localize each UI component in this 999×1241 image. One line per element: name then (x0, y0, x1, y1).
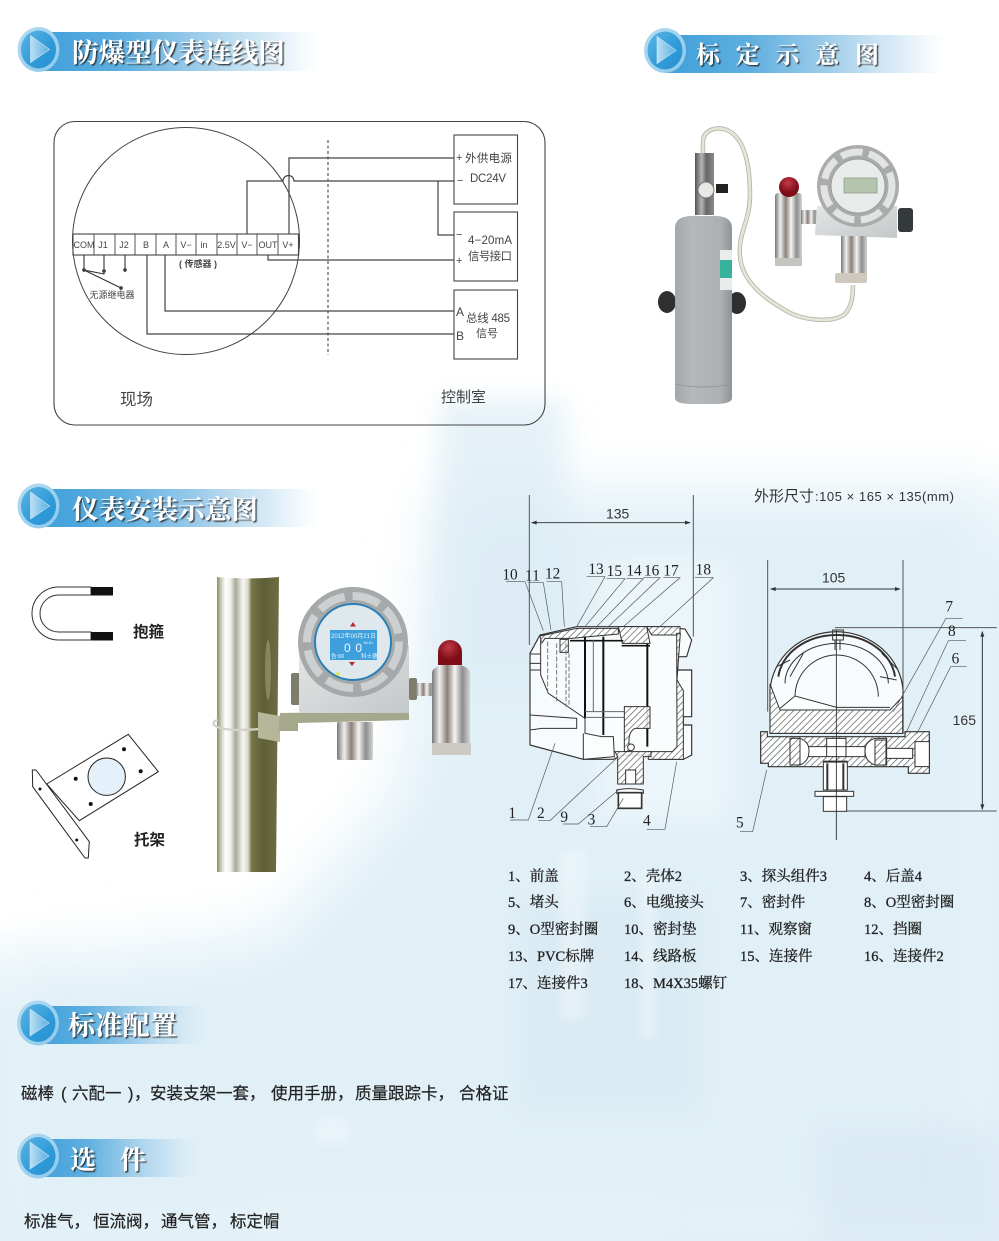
part numbers: 15 (607, 563, 622, 580)
mounting pole (217, 577, 279, 872)
alarm lamp (775, 177, 818, 266)
heading: installation banner (18, 484, 318, 528)
terminal block: V− (180, 240, 192, 250)
hatched top wall (540, 627, 680, 643)
parts list: 14、线路板 (624, 947, 697, 965)
terminal block: J2 (119, 240, 129, 250)
centre line (835, 630, 838, 840)
heading: standard configuration banner: 标准配置 (68, 1011, 177, 1041)
front cover wedge and inner parts (541, 640, 614, 759)
LCD screen: 0 0 (344, 641, 362, 655)
label: field: 现场 (120, 390, 153, 409)
parts list: 17、连接件3 (508, 975, 588, 992)
drawing: front section (736, 560, 997, 840)
part numbers: 10 (502, 566, 518, 583)
terminal block: COM (74, 240, 94, 250)
photo: pole mounted detector (214, 577, 471, 872)
terminal block (73, 234, 298, 255)
signal wires (147, 158, 454, 334)
heading: wiring diagram banner: 防爆型仪表连线图 (72, 38, 285, 68)
relay wiring (83, 255, 135, 300)
side gland (291, 673, 300, 705)
options text: 通气管， (161, 1212, 227, 1231)
part numbers: 14 (626, 562, 642, 579)
part numbers: 18 (696, 562, 711, 579)
strap (214, 720, 260, 730)
parts list: 11、观察窗 (740, 920, 812, 938)
parts list: 7、密封件 (740, 894, 806, 911)
hatched base (770, 684, 903, 733)
housing (299, 645, 409, 713)
LCD screen: %LEL (363, 640, 374, 645)
standard configuration text: 使用手册， (271, 1084, 354, 1103)
part numbers: 16 (644, 562, 660, 579)
leader lines (506, 577, 713, 829)
parts list: 8、O型密封圈 (864, 893, 954, 911)
part numbers: 11 (525, 568, 540, 585)
part numbers (736, 599, 960, 831)
part numbers: 3 (588, 812, 596, 829)
4-20mA box (454, 212, 518, 281)
part numbers: 12 (545, 566, 560, 583)
tube highlight (703, 128, 853, 320)
terminal block: V+ (282, 240, 294, 250)
LCD screen: 科士德 (361, 652, 378, 660)
heading: installation banner: 仪表安装示意图 (72, 495, 258, 525)
sensor label: ( 传感器 ) (179, 258, 217, 269)
standard configuration text: ， (134, 1085, 150, 1103)
icon: play button (17, 1000, 59, 1046)
icon: play button (644, 28, 686, 73)
heading: options banner: 选 (70, 1146, 96, 1175)
standard configuration text: 磁棒 (21, 1084, 54, 1103)
RS485 box: B (456, 329, 464, 343)
parts list: 3、探头组件3 (740, 867, 827, 885)
parts list: 2、壳体2 (624, 867, 682, 885)
dome (770, 630, 903, 733)
part numbers: 8 (948, 623, 956, 640)
regulator (695, 153, 728, 215)
dimension 105: 105 (822, 569, 846, 585)
options text: 恒流阀， (93, 1212, 159, 1231)
photo: calibration setup (658, 128, 913, 404)
part numbers: 7 (945, 599, 953, 616)
housing outline (530, 627, 692, 759)
label: U-bolt: 抱箍 (133, 622, 165, 641)
circuit boards (585, 637, 647, 747)
4-20mA box: 信号接口 (468, 250, 512, 263)
standard configuration text: ) (128, 1085, 134, 1103)
alarm lamp (432, 640, 471, 755)
rear wall (648, 633, 683, 759)
magnet discs (658, 291, 746, 314)
RS485 box: 总线 485 (466, 311, 510, 325)
clamp and bracket plate (258, 711, 409, 742)
RS485 box: 信号 (476, 327, 498, 340)
heading: calibration banner (644, 28, 945, 73)
parts list: 1、前盖 (508, 868, 559, 885)
part numbers: 13 (588, 561, 604, 578)
lower flange (761, 732, 929, 773)
parts list: 16、连接件2 (864, 948, 944, 965)
terminal block: 2.5V (217, 240, 236, 250)
icon: U-bolt (32, 587, 113, 640)
icon: mounting bracket (32, 734, 158, 858)
pipe (409, 678, 417, 700)
icon: play button (18, 27, 60, 72)
dimension 165: 165 (953, 712, 976, 728)
LCD screen: 2012年00月21日 (331, 632, 376, 640)
bottom sensor (815, 762, 854, 811)
label: bracket: 托架 (134, 831, 166, 849)
standard configuration text: 质量跟踪卡， (355, 1084, 454, 1103)
parts list: 15、连接件 (740, 948, 813, 965)
leader lines (740, 618, 967, 832)
parts list: 6、电缆接头 (624, 893, 704, 911)
sensor circle (72, 128, 300, 354)
parts list: 12、挡圈 (864, 921, 922, 938)
4-20mA box: + (456, 255, 462, 267)
parts list: 4、后盖4 (864, 868, 923, 885)
options text: 标定帽 (230, 1212, 280, 1231)
terminal block: J1 (98, 240, 108, 250)
power box: DC24V (470, 173, 506, 185)
parts list: 5、堵头 (508, 894, 559, 911)
dimension 135: 135 (606, 506, 630, 522)
part numbers (502, 561, 711, 829)
power box: − (457, 175, 463, 187)
keypad arrows (349, 622, 356, 666)
part numbers: 17 (663, 562, 679, 579)
terminal block: B (143, 240, 149, 250)
panel: wiring diagram (54, 122, 545, 425)
power box: 外供电源 (465, 151, 512, 165)
standard configuration text: 安装支架一套， (150, 1084, 266, 1103)
part numbers: 9 (560, 809, 568, 826)
power box: + (456, 152, 462, 164)
part numbers: 6 (952, 650, 960, 667)
background: refinery silhouette (0, 394, 999, 1241)
label: control room: 控制室 (441, 389, 486, 406)
standard configuration text: 六配一 (72, 1084, 122, 1103)
heading: calibration banner: 标定示意图 (696, 41, 879, 69)
LCD screen (330, 630, 378, 660)
heading: standard configuration banner (17, 1000, 206, 1046)
4-20mA box: − (456, 229, 462, 241)
terminal block: V− (241, 240, 253, 250)
terminal block: A (163, 240, 169, 250)
heading: options banner: 件 (120, 1146, 146, 1175)
icon: play button (18, 484, 60, 528)
part numbers: 1 (508, 805, 516, 822)
drawing: side section (502, 495, 713, 829)
dimension 165 (835, 628, 997, 811)
dimension 135 (529, 495, 693, 645)
sensor body (815, 145, 913, 283)
parts list (508, 867, 954, 992)
part numbers: 5 (736, 814, 744, 831)
terminal block: OUT (258, 240, 278, 250)
top note: external dimensions: :105 × 165 × 135(mm) (815, 489, 954, 504)
parts list: 9、O型密封圈 (508, 920, 598, 938)
heading: wiring diagram banner (18, 27, 318, 72)
4-20mA box: 4−20mA (468, 235, 512, 247)
gas cylinder (675, 216, 732, 404)
control room divider (327, 140, 329, 355)
parts list: 10、密封垫 (624, 921, 696, 938)
icon: play button (17, 1134, 59, 1178)
gas tube (703, 128, 853, 320)
terminal block: in (200, 240, 208, 250)
pole highlight (265, 640, 271, 700)
part numbers: 2 (537, 805, 545, 822)
heading: options banner (17, 1134, 198, 1178)
standard configuration text: ( (61, 1085, 67, 1103)
LCD screen: 告:00 (331, 652, 344, 660)
dimension 105 (768, 560, 903, 713)
parts list: 13、PVC标牌 (508, 948, 594, 965)
RS485 box: A (456, 305, 464, 319)
RS485 box (454, 290, 518, 359)
gas sensor head (337, 722, 373, 760)
part numbers: 4 (643, 812, 651, 829)
parts list: 18、M4X35螺钉 (624, 975, 728, 992)
power box (454, 135, 518, 204)
relay wiring: 无源继电器 (89, 289, 135, 300)
sensor mount (624, 707, 650, 752)
standard configuration text: 合格证 (459, 1084, 508, 1103)
top note: external dimensions: 外形尺寸 (754, 488, 814, 505)
options text: 标准气， (24, 1212, 90, 1231)
